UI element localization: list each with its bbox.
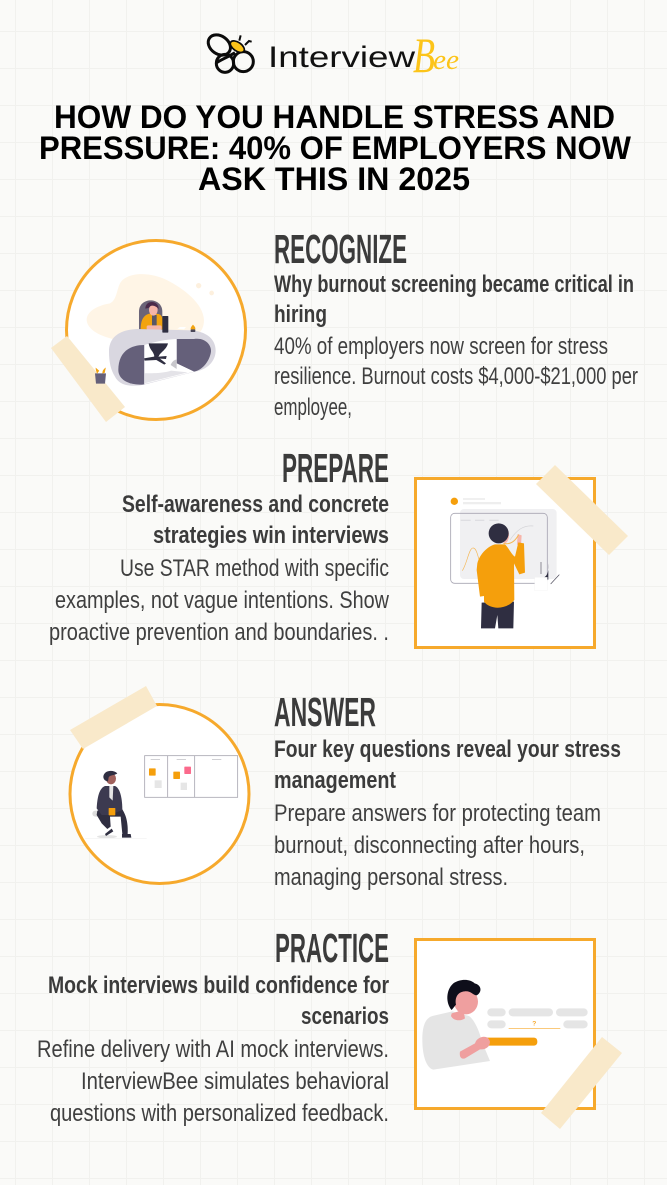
illustration: person answering question: ? — [532, 1021, 536, 1028]
heading: PREPARE — [282, 445, 389, 491]
title: PRESSURE: 40% OF EMPLOYERS NOW — [39, 130, 632, 166]
text block: practice: scenarios — [301, 1003, 389, 1030]
tape — [541, 1037, 622, 1129]
text block: prepare: strategies win interviews — [153, 522, 389, 549]
subheading: Mock interviews build confidence for — [48, 972, 389, 999]
text block: practice: questions with personalized feedback. — [50, 1100, 389, 1127]
logo script: B — [413, 27, 435, 83]
text block: answer: managing personal stress. — [274, 864, 508, 891]
heading: PRACTICE — [275, 925, 389, 971]
panel: recognize illustration — [51, 240, 246, 422]
illustration: person at chart — [451, 498, 559, 628]
heading: RECOGNIZE — [274, 226, 407, 272]
illustration: person and task board — [85, 756, 238, 838]
text block: recognize: employee, — [274, 394, 352, 421]
logo wordmark: Interview — [268, 41, 415, 74]
panel: answer illustration — [70, 686, 249, 884]
logo script: ee — [433, 45, 459, 76]
illustration: person at desk — [87, 274, 216, 386]
text block: answer: Prepare answers for protecting team — [274, 800, 601, 827]
title — [39, 99, 632, 197]
tape — [536, 465, 628, 555]
logo script — [413, 27, 459, 83]
text block: answer: burnout, disconnecting after hours, — [274, 832, 585, 859]
text block: practice: Refine delivery with AI mock interviews. — [37, 1036, 389, 1063]
illustration: person answering question — [422, 980, 588, 1070]
text block: recognize — [274, 226, 638, 421]
text block: recognize: hiring — [274, 301, 327, 328]
panel: practice illustration — [416, 940, 622, 1129]
text block: prepare — [49, 445, 390, 646]
tape — [51, 336, 125, 422]
logo: InterviewBee — [204, 27, 459, 83]
subheading: Self-awareness and concrete — [122, 491, 389, 518]
icon: bee — [204, 31, 253, 72]
text block: practice: InterviewBee simulates behavioral — [81, 1068, 389, 1095]
heading: ANSWER — [274, 689, 376, 735]
title: HOW DO YOU HANDLE STRESS AND — [54, 99, 615, 135]
title: ASK THIS IN 2025 — [198, 161, 470, 197]
tape — [70, 686, 157, 749]
panel: prepare illustration — [416, 465, 628, 648]
text block: answer — [274, 689, 621, 891]
text block: answer: management — [274, 767, 396, 794]
text block: prepare: examples, not vague intentions. Show — [55, 587, 390, 614]
text block: prepare: proactive prevention and boundaries. . — [49, 619, 389, 646]
text block: prepare: Use STAR method with specific — [120, 555, 389, 582]
text block: practice — [37, 925, 389, 1127]
